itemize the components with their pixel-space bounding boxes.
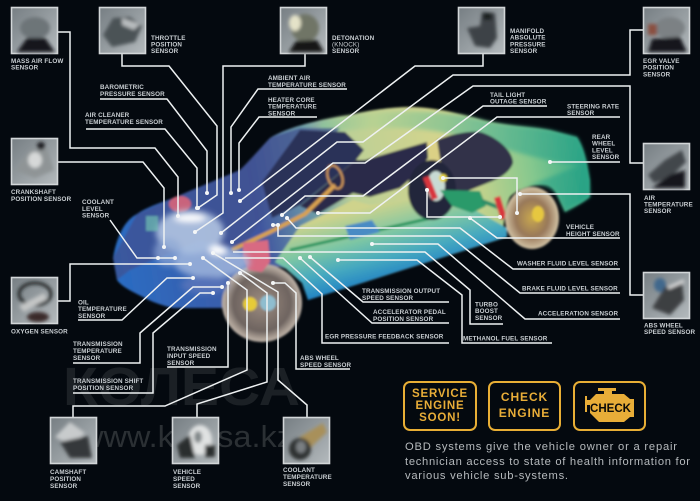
label: vehicle height sensor: VEHICLE	[566, 224, 594, 231]
label: throttle position sensor: SENSOR	[151, 48, 179, 55]
label: acceleration sensor: ACCELERATION SENSOR	[538, 310, 619, 318]
label: mass air flow sensor: SENSOR	[11, 64, 39, 72]
label: vehicle height sensor: HEIGHT SENSOR	[566, 231, 620, 238]
sensor thumbnail: air temperature	[644, 144, 690, 190]
sensor thumbnail: mass air flow	[12, 8, 58, 54]
label: heater core temperature sensor: SENSOR	[268, 110, 296, 117]
label: accelerator pedal position sensor: POSITION SENSOR	[373, 316, 434, 323]
label: transmission output speed sensor: SPEED SENSOR	[362, 295, 413, 302]
label: tail light outage sensor: OUTAGE SENSOR	[490, 98, 547, 106]
green brake line	[290, 216, 440, 250]
label: turbo boost sensor: TURBO	[475, 302, 498, 308]
description text: various vehicle sub-systems.	[405, 470, 568, 482]
label: oil temperature sensor: SENSOR	[78, 313, 106, 320]
label: transmission input speed sensor: SENSOR	[167, 360, 195, 367]
label: oxygen sensor: OXYGEN SENSOR	[11, 328, 68, 336]
label: vehicle speed sensor: SENSOR	[173, 483, 201, 490]
yellow sensor	[439, 174, 447, 182]
radiator	[146, 216, 158, 231]
label: coolant level sensor: LEVEL	[82, 206, 103, 213]
front side window	[300, 142, 428, 214]
sensor thumbnail: coolant temperature	[284, 418, 330, 464]
label: camshaft position sensor: POSITION	[50, 476, 81, 483]
label: detonation sensor: (KNOCK)	[332, 42, 359, 49]
red strut right	[494, 196, 507, 220]
label: transmission temperature sensor: TEMPERATURE	[73, 348, 122, 355]
label: washer fluid level sensor: WASHER FLUID LEVEL SENSOR	[517, 260, 619, 268]
side panel	[275, 196, 507, 300]
label: throttle position sensor: POSITION	[151, 42, 182, 49]
sensor thumbnail: vehicle speed	[172, 418, 218, 464]
label: manifold absolute pressure sensor: MANIFOLD	[510, 28, 545, 35]
label: heater core temperature sensor: HEATER CORE	[268, 97, 315, 104]
label: brake fluid level sensor: BRAKE FLUID LEVEL SENSOR	[522, 286, 618, 292]
rear wheel	[505, 187, 559, 249]
label: methanol fuel sensor: METHANOL FUEL SENSOR	[463, 336, 548, 342]
windshield	[262, 130, 364, 218]
watermark: www.kolesa.kz	[79, 419, 293, 454]
sensor thumbnail: detonation	[280, 8, 326, 54]
warning light: check engine	[489, 382, 560, 430]
description text: OBD systems give the vehicle owner or a repair	[405, 441, 677, 453]
label: transmission temperature sensor: TRANSMISSION	[73, 341, 123, 348]
label: air cleaner temperature sensor: AIR CLEANER	[85, 112, 130, 119]
label: air temperature sensor: TEMPERATURE	[644, 202, 693, 209]
label: oil temperature sensor: OIL	[78, 300, 89, 306]
label: steering rate sensor: STEERING RATE	[567, 104, 619, 110]
label: barometric pressure sensor: BAROMETRIC	[100, 84, 144, 91]
label: camshaft position sensor: SENSOR	[50, 483, 78, 490]
label: vehicle speed sensor: VEHICLE	[173, 469, 201, 476]
pink air box	[169, 196, 191, 212]
label: air cleaner temperature sensor: TEMPERATURE SENSOR	[85, 119, 163, 126]
label: transmission temperature sensor: SENSOR	[73, 355, 101, 362]
rear axle housing	[408, 160, 456, 220]
sensor thumbnail: ABS wheel speed	[644, 272, 690, 318]
yellow pillar	[427, 140, 443, 178]
sensor thumbnail: manifold absolute pressure	[458, 8, 504, 54]
steering wheel	[324, 163, 346, 191]
label: coolant temperature sensor: SENSOR	[283, 481, 311, 488]
rear shaft	[482, 201, 500, 208]
label: EGR valve position sensor: POSITION	[643, 65, 674, 72]
label: ambient air temperature sensor: TEMPERATURE SENSOR	[268, 82, 346, 89]
warning light: service engine soon: SERVICE	[412, 388, 468, 400]
label: coolant temperature sensor: COOLANT	[283, 467, 315, 474]
sensor end dots	[156, 160, 552, 295]
label: EGR valve position sensor: EGR VALVE	[643, 58, 680, 65]
sensor thumbnail: oxygen	[12, 278, 58, 324]
label: rear wheel level sensor: SENSOR	[592, 154, 620, 161]
sensor thumbnail: crankshaft position	[12, 138, 58, 184]
rear side window	[437, 132, 513, 196]
label: manifold absolute pressure sensor: ABSOLUTE	[510, 35, 546, 42]
front hub	[243, 297, 257, 311]
front brake disc	[260, 295, 276, 311]
label: coolant level sensor: COOLANT	[82, 199, 114, 206]
warning light: check engine: CHECK	[501, 390, 548, 404]
warning light: check engine icon	[574, 382, 645, 430]
label: steering rate sensor: SENSOR	[567, 110, 595, 117]
label: camshaft position sensor: CAMSHAFT	[50, 469, 86, 476]
label: air temperature sensor: AIR	[644, 195, 656, 202]
leader lines	[58, 30, 643, 417]
rear hub	[532, 206, 544, 222]
warning light: check engine: ENGINE	[499, 406, 550, 420]
pink front suspension	[243, 240, 270, 272]
label: throttle position sensor: THROTTLE	[151, 35, 186, 42]
hood	[113, 128, 340, 280]
label: transmission shift position sensor: TRANSMISSION SHIFT	[73, 378, 143, 385]
label: ambient air temperature sensor: AMBIENT AIR	[268, 75, 311, 82]
car illustration	[113, 107, 590, 342]
label: ABS wheel speed sensor right: SPEED SENSOR	[644, 329, 695, 336]
red strut left	[423, 176, 438, 200]
label: ABS wheel speed sensor front: ABS WHEEL	[300, 355, 339, 362]
sensor thumbnail: camshaft position	[50, 418, 96, 464]
label: manifold absolute pressure sensor: SENSOR	[510, 48, 538, 55]
label: tail light outage sensor: TAIL LIGHT	[490, 92, 525, 99]
label: manifold absolute pressure sensor: PRESSURE	[510, 41, 546, 48]
warning light: service engine soon: ENGINE	[416, 400, 464, 412]
label: EGR pressure feedback sensor: EGR PRESSURE FEEDBACK SENSOR	[325, 334, 444, 340]
label: turbo boost sensor: SENSOR	[475, 315, 503, 322]
warning light: service engine soon: SOON!	[419, 412, 461, 424]
label: oil temperature sensor: TEMPERATURE	[78, 306, 127, 313]
label: ABS wheel speed sensor front: SPEED SENSOR	[300, 362, 351, 369]
blue panel	[345, 220, 380, 240]
label: heater core temperature sensor: TEMPERATURE	[268, 104, 317, 111]
description text: technician access to state of health information for	[405, 456, 690, 468]
label: ABS wheel speed sensor right: ABS WHEEL	[644, 322, 683, 330]
label: detonation sensor: SENSOR	[332, 48, 360, 55]
differential	[440, 190, 486, 213]
label: turbo boost sensor: BOOST	[475, 308, 498, 315]
label: accelerator pedal position sensor: ACCELERATOR PEDAL	[373, 309, 446, 316]
car body	[113, 107, 590, 308]
label: transmission input speed sensor: TRANSMISSION	[167, 346, 217, 353]
steering column	[232, 185, 335, 250]
label: rear wheel level sensor: LEVEL	[592, 147, 613, 154]
label: coolant level sensor: SENSOR	[82, 212, 110, 220]
label: coolant temperature sensor: TEMPERATURE	[283, 474, 332, 481]
label: EGR valve position sensor: SENSOR	[643, 71, 671, 78]
sensor thumbnail: throttle position	[100, 8, 146, 54]
label: air temperature sensor: SENSOR	[644, 208, 672, 215]
label: rear wheel level sensor: WHEEL	[592, 141, 615, 148]
label: transmission output speed sensor: TRANSMISSION OUTPUT	[362, 288, 440, 295]
watermark	[63, 357, 300, 454]
label: barometric pressure sensor: PRESSURE SENSOR	[100, 91, 165, 98]
rear axle centre	[427, 171, 445, 201]
warning light: service engine soon	[404, 382, 476, 430]
engine glow	[154, 210, 250, 294]
label: transmission input speed sensor: INPUT SPEED	[167, 353, 211, 360]
label: detonation sensor: DETONATION	[332, 35, 375, 42]
warning light: check engine icon: CHECK	[590, 401, 631, 415]
label: vehicle speed sensor: SPEED	[173, 476, 195, 483]
label: mass air flow sensor: MASS AIR FLOW	[11, 58, 63, 65]
label: rear wheel level sensor: REAR	[592, 134, 611, 141]
front wheel	[222, 264, 302, 342]
label: crankshaft position sensor: CRANKSHAFT	[11, 189, 56, 196]
label: crankshaft position sensor: POSITION SENSOR	[11, 196, 72, 203]
roof and rear shading	[320, 111, 590, 212]
watermark: КОЛЕСА	[63, 357, 300, 417]
sensor thumbnail: EGR valve position	[644, 8, 690, 54]
label: transmission shift position sensor: POSITION SENSOR	[73, 385, 134, 392]
